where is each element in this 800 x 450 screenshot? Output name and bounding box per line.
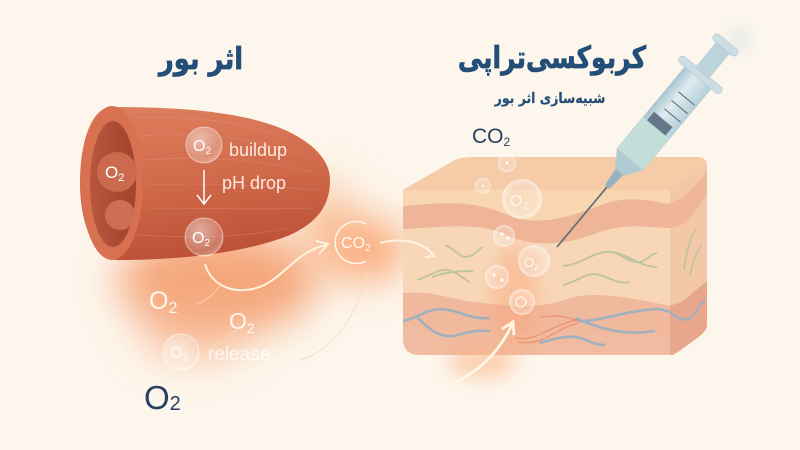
inner ball	[105, 200, 135, 230]
CO2 bubbles: O	[510, 193, 522, 210]
O2 buildup bubble: 2	[205, 146, 211, 157]
muscle opening interior	[90, 121, 136, 247]
floating O2 second: 2	[247, 320, 255, 336]
arrow from below	[440, 322, 514, 388]
inner O2 ball: O	[105, 163, 118, 182]
glow: skin	[491, 245, 539, 345]
release bubble: 2	[182, 353, 188, 364]
CO2 label: CO	[472, 125, 504, 148]
floating O2: O	[149, 287, 168, 315]
O2 bubble lower: 2	[204, 238, 210, 249]
skin block	[403, 157, 707, 355]
blue vessels	[403, 309, 670, 345]
CO2 bubbles: 2	[522, 201, 528, 212]
skin top face	[403, 157, 707, 190]
infographic canvas	[80, 28, 750, 410]
CO2 bubbles: O	[524, 255, 534, 270]
release bubble: O	[170, 345, 182, 362]
syringe glow	[728, 28, 748, 52]
title: carboxytherapy: کربوکسی‌تراپی	[458, 40, 647, 76]
side fibres	[684, 229, 702, 276]
front layers	[403, 190, 670, 355]
dark O2 label: O	[144, 379, 170, 416]
side vessel	[670, 302, 705, 320]
CO2 ring: CO	[341, 235, 365, 252]
CO2 ring: 2	[365, 243, 371, 254]
subtitle: شبیه‌سازی اثر بور	[494, 91, 605, 107]
floating O2 second: O	[229, 308, 247, 334]
syringe	[536, 25, 749, 264]
faint curves	[198, 270, 368, 360]
O2 bubble lower	[185, 218, 223, 256]
skin side face	[670, 165, 707, 355]
release bubble	[163, 334, 199, 370]
title: Bohr effect: اثر بور	[157, 41, 243, 77]
O2 bubble lower: O	[192, 230, 204, 247]
label: pH drop: pH drop	[222, 173, 286, 193]
CO2 bubbles: 2	[534, 262, 539, 272]
red vessels	[515, 316, 578, 343]
label: buildup: buildup	[229, 140, 287, 160]
green fibres	[417, 245, 657, 285]
label: release: release	[208, 344, 270, 365]
muscle opening rim	[81, 106, 143, 260]
arrow: down	[197, 170, 211, 204]
inner O2 ball	[97, 152, 137, 192]
floating O2: 2	[168, 300, 177, 317]
arrow into skin	[380, 241, 434, 257]
arrow: curve to CO2	[205, 241, 328, 290]
CO2 bubbles	[475, 154, 550, 315]
glow: oxygen release	[118, 180, 407, 360]
CO2 label: 2	[504, 135, 510, 149]
O2 buildup bubble	[186, 127, 222, 163]
CO2 ring	[335, 221, 371, 264]
dark O2 label: 2	[170, 393, 181, 415]
O2 buildup bubble: O	[193, 138, 205, 155]
glow: below skin	[448, 346, 516, 378]
muscle fibre	[80, 106, 330, 260]
inner O2 ball: 2	[118, 172, 124, 184]
